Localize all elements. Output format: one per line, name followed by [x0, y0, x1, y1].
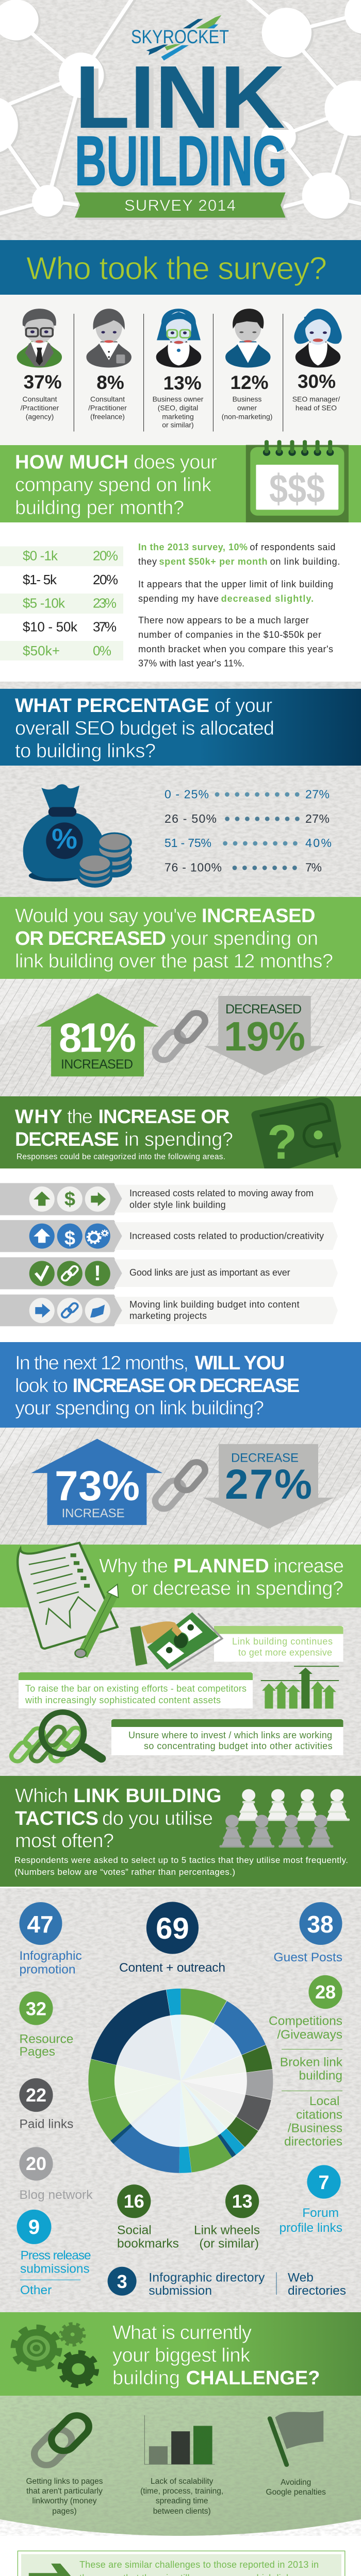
stat: 13 link wheels: 13	[232, 2191, 253, 2212]
reason row: good links: Good links are just as important as ever	[129, 1267, 290, 1278]
table: monthly spend brackets: 37%	[93, 619, 117, 635]
stat: 7 forum profile links: profile links	[279, 2221, 342, 2235]
text block: survey comparison: spent $50k+ per month	[159, 556, 267, 567]
stat: 16 social bookmarks	[117, 2184, 179, 2250]
stat: 47 infographic promotion	[20, 1902, 82, 1977]
reason row: older style link building: Increased costs related to moving away from	[129, 1188, 314, 1198]
callout: similar challenges to 2013: These are similar challenges to those reported in 2013 in	[79, 2560, 319, 2570]
heading band: who took the survey	[0, 240, 361, 295]
reason row: good links: !	[94, 1261, 101, 1285]
reason row: content marketing: marketing projects	[129, 1311, 207, 1321]
text: lack of scalability: Lack of scalability	[151, 2477, 214, 2486]
heading band: what percentage: to building links?	[15, 740, 156, 762]
stat: 3 infographic directory and web directories: Infographic directory	[149, 2271, 265, 2285]
icon: calendar with dollars	[246, 440, 349, 522]
chart: tactics donut	[69, 1969, 293, 2193]
header: paper background with network	[0, 0, 361, 241]
stat: 3 infographic directory and web directories: submission	[149, 2284, 212, 2298]
stat: 30% SEO manager: SEO manager/	[292, 395, 340, 403]
stat: 28 competitions, broken links, local citations: building	[299, 2069, 342, 2083]
heading band: how much spend per month: company spend on link	[15, 474, 212, 496]
heading band: how much spend per month: does your	[134, 451, 217, 473]
stat: 37% consultant agency: Consultant	[23, 395, 57, 403]
stat: 47 infographic promotion: promotion	[20, 1963, 75, 1977]
panel: reasons list	[0, 1168, 361, 1342]
stat: 38 guest posts: Guest Posts	[274, 1951, 342, 1964]
heading band: why planned	[0, 1545, 361, 1607]
heading band: how much spend per month: HOW MUCH	[15, 451, 128, 473]
stat: 7 forum profile links: Forum	[302, 2206, 339, 2220]
arrow: 73% increase: INCREASE	[62, 1506, 125, 1520]
heading band: next 12 months: look to	[15, 1375, 68, 1397]
logo: Skyrocket	[131, 15, 229, 61]
arrow: 73% increase	[31, 1439, 162, 1525]
arrow: 19% decreased: 19%	[224, 1013, 305, 1059]
logo: Skyrocket: SKYROCKET	[131, 26, 229, 47]
heading band: most often tactics: most often?	[15, 1831, 114, 1852]
icon: exchange arrows	[28, 2564, 71, 2576]
heading band: increased or decreased: link building over the past 12 months?	[15, 951, 333, 972]
text: avoiding google penalties	[266, 2478, 326, 2497]
callout: unsure where to invest: so concentrating budget into other activities	[144, 1741, 333, 1751]
stat: 37% consultant agency: /Practitioner	[21, 404, 59, 412]
heading band: biggest challenge: What is currently	[112, 2322, 252, 2344]
heading band: what percentage: of your	[215, 695, 273, 717]
text block: survey comparison: decreased slightly.	[221, 594, 314, 604]
heading band: increased or decreased: Would you say you've	[15, 905, 197, 927]
stat: 7 forum profile links: 7	[318, 2172, 330, 2194]
stat: 38 guest posts	[274, 1902, 342, 1964]
table: monthly spend brackets: 23%	[93, 596, 117, 611]
icon: money bag and coins: %	[52, 822, 77, 855]
icon: checklist and pencil	[18, 1543, 118, 1657]
heading band: why the increase or decrease: Responses could be categorized into the following areas.	[17, 1153, 225, 1161]
heading band: increased or decreased: INCREASED	[202, 905, 316, 927]
stat: 12% business owner non-marketing: Business	[233, 395, 261, 403]
text: lack of scalability: spreading time	[156, 2497, 208, 2505]
icon: chain link	[152, 1010, 209, 1063]
heading band: why the increase or decrease: the	[67, 1106, 93, 1128]
arrow: 27% decrease	[203, 1444, 334, 1529]
callout: link building more expensive	[130, 1612, 343, 1670]
text block: survey comparison: number of companies in the $10-$50k per	[138, 630, 321, 640]
heading band: increased or decreased	[0, 897, 361, 979]
stat: 28 competitions, broken links, local citations: /Business	[288, 2122, 342, 2136]
stat: 30% SEO manager: 30%	[298, 371, 336, 392]
callout: unsure where to invest	[111, 1719, 343, 1755]
stat: 16 social bookmarks: Social	[117, 2224, 152, 2238]
callout: raise the bar: To raise the bar on existing efforts - beat competitors	[25, 1684, 247, 1694]
stat: 8% consultant freelance: 8%	[96, 372, 124, 393]
stat: 9 press release and other	[17, 2210, 91, 2297]
reason row: older style link building: older style link building	[129, 1199, 226, 1210]
arrow: 27% decrease: 27%	[225, 1461, 312, 1508]
reason row: good links	[0, 1257, 338, 1289]
stat: 28 competitions, broken links, local citations: /Giveaways	[277, 2028, 342, 2042]
heading band: next 12 months: WILL YOU	[195, 1352, 285, 1374]
stat: 69 content and outreach	[119, 1902, 225, 1975]
stat: 69 content and outreach: 69	[156, 1912, 189, 1945]
text: links to pages	[26, 2477, 103, 2516]
text: links to pages: Getting links to pages	[26, 2477, 103, 2486]
heading band: why planned: Why the	[99, 1555, 168, 1577]
stat: 13% business owner SEO: marketing	[162, 412, 194, 420]
text: links to pages: that aren't particularly	[26, 2487, 103, 2496]
heading band: most often tactics: Which	[15, 1785, 68, 1807]
stat: 47 infographic promotion: Infographic	[20, 1949, 82, 1963]
icon: money bag and coins	[23, 784, 132, 888]
stat: 12% business owner non-marketing: owner	[237, 404, 257, 412]
stat: 28 competitions, broken links, local citations: directories	[284, 2135, 342, 2148]
stat: 3 infographic directory and web directories: directories	[288, 2284, 346, 2298]
text block: survey comparison: spending my have	[138, 594, 219, 604]
heading band: most often tactics: Respondents were asked to select up to 5 tactics that they utilise most frequently.	[14, 1855, 348, 1865]
stat: 13% business owner SEO	[153, 372, 204, 429]
text block: survey comparison: There now appears to be a much larger	[138, 615, 309, 625]
stat: 37% consultant agency: 37%	[24, 371, 62, 393]
heading band: biggest challenge: building	[112, 2367, 180, 2389]
chart: dotted budget share rows: 76 - 100%	[165, 860, 222, 874]
text block: survey comparison: they	[138, 556, 157, 567]
heading band: why the increase or decrease: in spending?	[124, 1129, 233, 1150]
curved challenge area	[0, 2396, 361, 2536]
chart: dotted budget share rows: 27%	[305, 812, 330, 825]
heading band: most often tactics: do you utilise	[102, 1808, 213, 1829]
table: monthly spend brackets: $10 - 50k	[23, 619, 78, 635]
reason row: content marketing: Moving link building budget into content	[129, 1299, 299, 1310]
heading band: next 12 months: INCREASE OR DECREASE	[73, 1375, 300, 1397]
reason row: production and creativity: $	[64, 1228, 75, 1249]
heading band: biggest challenge: your biggest link	[112, 2345, 251, 2366]
callout: unsure where to invest: Unsure where to invest / which links are working	[128, 1730, 332, 1740]
stat: 22 paid links: Paid links	[20, 2117, 73, 2131]
arrow: 81% increased: 81%	[59, 1015, 136, 1061]
heading band: increased or decreased: your spending on	[171, 928, 318, 950]
callout: link building more expensive: Link building continues	[232, 1636, 333, 1647]
text: avoiding google penalties: Avoiding	[281, 2478, 311, 2487]
stat: 13 link wheels: Link wheels	[194, 2224, 260, 2238]
stat: 37% consultant agency: (agency)	[26, 412, 54, 420]
callout: link building more expensive: to get more expensive	[238, 1648, 332, 1658]
table: monthly spend brackets: $0 -1k	[23, 548, 58, 564]
heading band: what percentage: overall SEO budget is allocated	[15, 718, 274, 739]
table: monthly spend brackets: 0%	[93, 643, 111, 658]
chart: dotted budget share rows: 51 - 75%	[165, 836, 211, 850]
stat: 12% business owner non-marketing	[222, 372, 272, 420]
table: monthly spend brackets	[0, 546, 123, 660]
heading band: next 12 months: your spending on link building?	[15, 1398, 264, 1419]
arrow: 73% increase: 73%	[55, 1463, 140, 1510]
icon: calendar with dollars: $$$	[269, 466, 325, 511]
icon: wallet with question mark: ?	[267, 1115, 297, 1170]
stat: 30% SEO manager	[292, 371, 340, 412]
heading band: why the increase or decrease: WHY	[15, 1106, 62, 1128]
stat: 28 competitions, broken links, local citations: citations	[296, 2108, 342, 2122]
icon: rising arrows	[261, 1666, 339, 1708]
panel: why the planned change	[0, 1543, 361, 1776]
text: lack of scalability: (time, process, training,	[140, 2487, 223, 2496]
callout: similar challenges to 2013	[18, 2551, 345, 2576]
stat: 9 press release and other: submissions	[20, 2262, 90, 2276]
stat: 16 social bookmarks: bookmarks	[117, 2236, 179, 2250]
table: monthly spend brackets: 20%	[93, 572, 118, 587]
stat: 32 resource pages: 32	[26, 1998, 46, 2019]
chart: dotted budget share rows	[165, 787, 332, 874]
stat: 8% consultant freelance: (freelance)	[90, 412, 125, 420]
icon: wallet with question mark	[251, 1097, 341, 1175]
arrow: 81% increased	[37, 993, 159, 1076]
icons: five respondent avatars	[17, 309, 342, 367]
arrow: 19% decreased	[204, 996, 325, 1075]
chart: dotted budget share rows: 27%	[305, 787, 330, 801]
stat: 8% consultant freelance	[88, 372, 127, 420]
heading band: why the increase or decrease: INCREASE OR	[98, 1106, 230, 1128]
table: monthly spend brackets: 20%	[93, 548, 118, 564]
stat: 32 resource pages	[19, 1991, 73, 2059]
reason row: older style link building: $	[64, 1189, 75, 1210]
stat: 9 press release and other: Press release	[21, 2249, 91, 2263]
heading band: next 12 months: In the next 12 months,	[15, 1352, 189, 1374]
stat: 13% business owner SEO: (SEO, digital	[158, 404, 198, 412]
stat: 22 paid links	[19, 2078, 73, 2131]
icon: bar chart	[144, 2415, 215, 2464]
stat: 20 blog network: 20	[26, 2153, 46, 2174]
heading band: who took the survey: Who took the survey?	[26, 251, 327, 286]
stat: 28 competitions, broken links, local citations: Broken link	[280, 2056, 343, 2070]
icon: rows of pawns	[219, 1789, 350, 1848]
text block: survey comparison: month bracket when you compare this year's	[138, 644, 333, 654]
icon: chain link	[152, 1459, 209, 1512]
text block: survey comparison	[138, 542, 340, 669]
heading band: why planned: or decrease in spending?	[131, 1578, 343, 1599]
heading band: what percentage	[0, 689, 361, 766]
heading band: biggest challenge: CHALLENGE?	[186, 2367, 320, 2389]
arrow: 81% increased: INCREASED	[61, 1057, 133, 1072]
arrow: 27% decrease: DECREASE	[231, 1451, 299, 1465]
stat: 13% business owner SEO: or similar)	[162, 420, 194, 429]
text block: survey comparison: on link building.	[270, 556, 340, 567]
heading band: next 12 months	[0, 1342, 361, 1428]
table: monthly spend brackets: $1- 5k	[23, 572, 57, 587]
stat: 3 infographic directory and web directories: Web	[288, 2271, 314, 2285]
title: Link Building: LINK	[75, 47, 285, 147]
stat: 20 blog network	[19, 2147, 93, 2202]
panel: past spending result	[0, 979, 361, 1096]
heading band: most often tactics	[0, 1776, 361, 1887]
heading band: biggest challenge	[0, 2312, 361, 2396]
stat: 28 competitions, broken links, local citations: 28	[315, 1981, 336, 2003]
heading band: increased or decreased: OR DECREASED	[15, 928, 166, 950]
stat: 28 competitions, broken links, local citations: Competitions	[269, 2014, 342, 2028]
stat: 12% business owner non-marketing: 12%	[230, 372, 269, 393]
panel: respondents	[0, 295, 361, 445]
stat: 28 competitions, broken links, local citations: Local	[309, 2094, 339, 2108]
stat: 22 paid links: 22	[26, 2084, 46, 2106]
icon: gears	[13, 2324, 97, 2386]
heading band: why planned: PLANNED	[173, 1555, 269, 1577]
heading band: why the increase or decrease	[0, 1096, 361, 1175]
panel: tactics most used	[0, 1888, 361, 2312]
stat: 7 forum profile links	[279, 2165, 342, 2235]
heading band: why planned: increase	[273, 1555, 344, 1577]
text: lack of scalability	[140, 2477, 223, 2516]
stat: 37% consultant agency	[21, 371, 62, 420]
text block: survey comparison: 37% with last year's 11%.	[138, 658, 244, 669]
heading band: how much spend per month: building per month?	[15, 497, 184, 519]
stat: 3 infographic directory and web directories: 3	[117, 2271, 127, 2292]
stat: 30% SEO manager: head of SEO	[296, 404, 337, 412]
stat: 47 infographic promotion: 47	[27, 1911, 54, 1938]
text block: survey comparison: In the 2013 survey, 10%	[138, 542, 248, 552]
title: Link Building: LINK	[79, 49, 290, 149]
panel: planned spending result	[0, 1428, 361, 1545]
panel: SEO budget percentage	[0, 682, 361, 897]
stat: 12% business owner non-marketing: (non-marketing)	[222, 412, 272, 420]
heading band: most often tactics: (Numbers below are “votes” rather than percentages.)	[14, 1867, 235, 1877]
ribbon: Survey 2014: SURVEY 2014	[124, 196, 236, 214]
text: lack of scalability: between clients)	[153, 2507, 211, 2516]
heading band: why the increase or decrease: DECREASE	[15, 1129, 119, 1150]
text: avoiding google penalties: Google penalties	[266, 2488, 326, 2497]
heading band: most often tactics: TACTICS	[15, 1808, 99, 1829]
table: monthly spend brackets: $5 -10k	[23, 596, 65, 611]
table: monthly spend brackets: $50k+	[23, 643, 60, 658]
stat: 9 press release and other: Other	[20, 2283, 52, 2297]
stat: 8% consultant freelance: Consultant	[90, 395, 125, 403]
stat: 3 infographic directory and web directories	[108, 2267, 346, 2298]
ribbon: Survey 2014	[75, 193, 288, 220]
callout: raise the bar	[19, 1672, 253, 1708]
panel: biggest challenge	[0, 2312, 361, 2576]
text: links to pages: linkworthy (money	[32, 2497, 97, 2505]
chart: dotted budget share rows: 7%	[305, 860, 322, 874]
stat: 69 content and outreach: Content + outreach	[119, 1961, 225, 1975]
icon: chain under magnifier	[9, 1712, 101, 1764]
stat: 28 competitions, broken links, local citations	[269, 1975, 343, 2148]
text block: survey comparison: It appears that the upper limit of link building	[138, 579, 333, 589]
stat: 32 resource pages: Resource	[20, 2032, 73, 2046]
stat: 13% business owner SEO: 13%	[163, 372, 202, 394]
chart: dotted budget share rows: 0 - 25%	[165, 787, 209, 801]
icon: flag	[270, 2411, 323, 2465]
stat: 8% consultant freelance: /Practitioner	[88, 404, 127, 412]
heading band: how much spend per month	[0, 440, 361, 522]
chart: dotted budget share rows: 26 - 50%	[165, 812, 217, 825]
stat: 20 blog network: Blog network	[20, 2188, 93, 2202]
stat: 9 press release and other: 9	[28, 2216, 40, 2239]
stat: 16 social bookmarks: 16	[124, 2191, 144, 2212]
panel: spend table and commentary	[0, 522, 361, 682]
heading band: most often tactics: LINK BUILDING	[73, 1785, 221, 1807]
stat: 13 link wheels: (or similar)	[199, 2236, 259, 2250]
icon: chain links	[29, 2411, 94, 2469]
heading band: what percentage: WHAT PERCENTAGE	[15, 695, 209, 717]
stat: 32 resource pages: Pages	[20, 2045, 55, 2059]
chart: dotted budget share rows: 40%	[305, 836, 332, 850]
reason row: production and creativity	[0, 1220, 338, 1252]
text block: survey comparison: of respondents said	[250, 542, 335, 552]
reason row: older style link building	[0, 1183, 338, 1215]
stat: 13% business owner SEO: Business owner	[153, 395, 204, 403]
text: links to pages: pages)	[52, 2507, 77, 2516]
stat: 13 link wheels	[194, 2184, 260, 2250]
reason row: production and creativity: Increased costs related to production/creativity	[129, 1231, 324, 1241]
callout: raise the bar: with increasingly sophisticated content assets	[25, 1695, 221, 1705]
arrow: 19% decreased: DECREASED	[225, 1002, 302, 1016]
stat: 38 guest posts: 38	[307, 1911, 334, 1938]
title: Link Building	[75, 47, 290, 201]
reason row: content marketing	[0, 1295, 338, 1326]
